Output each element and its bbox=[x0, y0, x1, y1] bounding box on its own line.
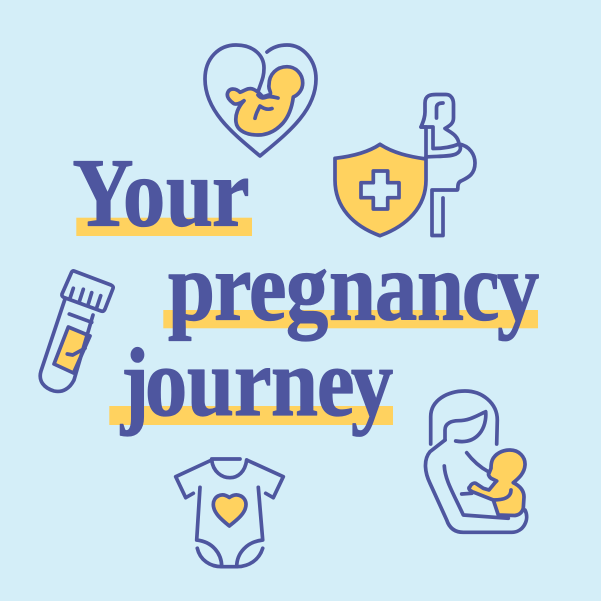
fetus limbs bbox=[255, 95, 278, 118]
heart bbox=[213, 495, 246, 526]
icon: baby onesie bbox=[176, 459, 283, 567]
fetus body bbox=[227, 67, 303, 135]
sleeves and body bbox=[176, 460, 283, 567]
baby bbox=[469, 450, 525, 516]
tube outline bbox=[40, 299, 93, 391]
leg openings bbox=[197, 548, 263, 567]
tube cap bbox=[62, 271, 113, 311]
highlight bar: journey bbox=[109, 406, 393, 425]
highlight bar: Your bbox=[76, 218, 252, 236]
mother hair bbox=[431, 391, 497, 444]
medical cross bbox=[361, 171, 399, 209]
neckline and arm bbox=[421, 127, 460, 157]
tube sample bbox=[54, 327, 90, 373]
baby arm bbox=[462, 490, 511, 500]
icon: breastfeeding mother and baby bbox=[425, 391, 527, 532]
highlight bar: pregnancy bbox=[163, 310, 538, 328]
title word: pregnancy: pregnancy bbox=[168, 233, 539, 341]
check mark bbox=[67, 348, 85, 355]
title word: journey: journey bbox=[120, 329, 393, 436]
title word: Your: Your bbox=[72, 139, 249, 247]
icon: fetus in heart bbox=[205, 45, 316, 156]
mother body and arm bbox=[425, 440, 527, 532]
heart outline bbox=[205, 45, 316, 156]
heading: Your pregnancy journey bbox=[72, 139, 539, 436]
hair strand bbox=[436, 103, 443, 118]
collar bbox=[212, 459, 247, 478]
woman outline bbox=[421, 94, 475, 236]
shield bbox=[335, 144, 426, 236]
level mark bbox=[69, 314, 92, 322]
cap ridges bbox=[70, 288, 101, 308]
chest line bbox=[467, 453, 488, 472]
inner arm bbox=[444, 466, 508, 518]
icon: pregnant woman with shield bbox=[335, 94, 475, 236]
icon: test tube bbox=[40, 271, 113, 391]
mother face bbox=[445, 412, 486, 442]
